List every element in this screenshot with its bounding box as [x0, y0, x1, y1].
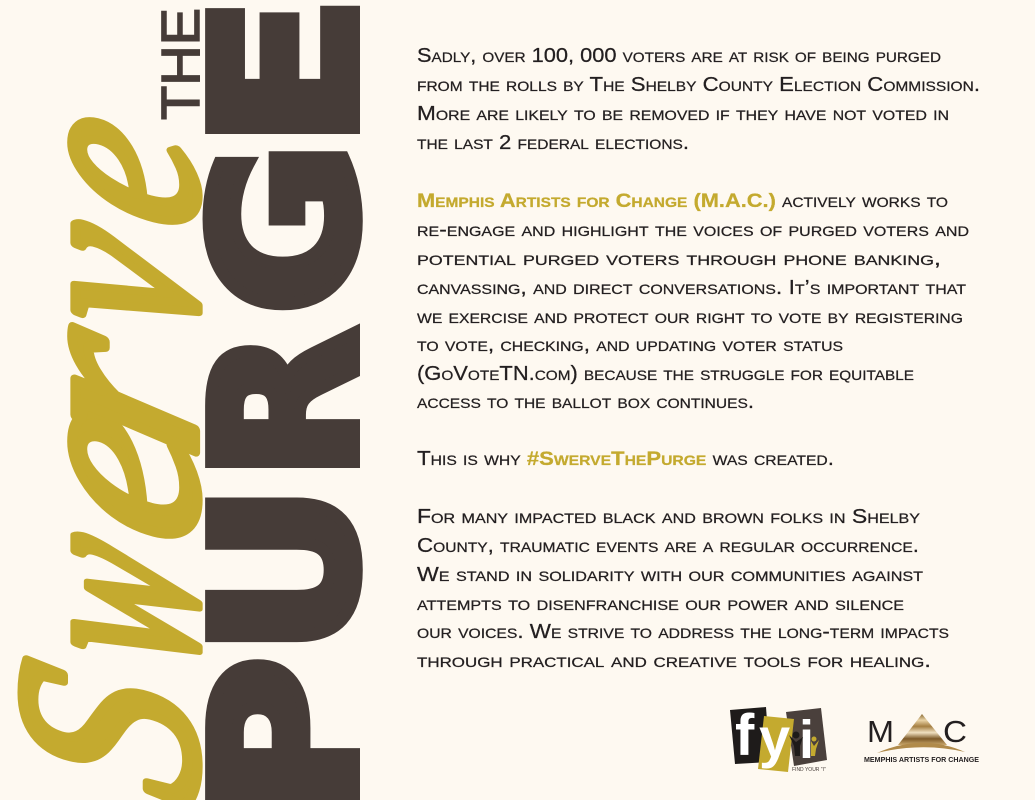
text block: Memphis Artists for Change paragraph: Memphis Artists for Change (M.A.C.) actively works to [417, 190, 948, 212]
text block: Memphis Artists for Change paragraph: to vote, checking, and updating voter status [417, 334, 843, 356]
text block: closing paragraph [417, 506, 949, 672]
text block: closing paragraph: attempts to disenfranchise our power and silence [417, 593, 904, 615]
text block: Memphis Artists for Change paragraph: (GoVoteTN.com) because the struggle for equitable [417, 363, 914, 385]
text block: intro paragraph [417, 45, 980, 154]
heading: PURGE: U [172, 485, 400, 655]
text block: Memphis Artists for Change paragraph: we exercise and protect our right to vote by registering [417, 306, 963, 328]
heading: Swerve script [0, 84, 252, 800]
text block: Memphis Artists for Change paragraph: canvassing, and direct conversations. It’s important that [417, 277, 967, 299]
text block: intro paragraph: Sadly, over 100, 000 voters are at risk of being purged [417, 45, 941, 67]
heading: THE: THE [151, 8, 211, 120]
text block: closing paragraph: County, traumatic events are a regular occurrence. [417, 535, 919, 557]
text block: Memphis Artists for Change paragraph [417, 190, 969, 413]
heading: PURGE: E [173, 0, 401, 148]
text block: closing paragraph: We stand in solidarity with our communities against [417, 564, 924, 586]
heading: PURGE [172, 0, 401, 800]
logo: Memphis Artists for Change: M [867, 714, 894, 749]
text block: intro paragraph: More are likely to be removed if they have not voted in [417, 103, 949, 125]
text block: hashtag line: This is why #SwerveThePurge was created. [417, 448, 834, 470]
logo: Memphis Artists for Change [864, 714, 979, 764]
logo: FYI Find Your I: i [799, 710, 814, 770]
text block: Memphis Artists for Change paragraph: potential purged voters through phone banking, [417, 248, 941, 270]
text block: Memphis Artists for Change paragraph: access to the ballot box continues. [417, 391, 754, 413]
logo: Memphis Artists for Change: MEMPHIS ARTISTS FOR CHANGE [864, 755, 979, 764]
heading: PURGE: R [173, 329, 401, 480]
text block: closing paragraph: through practical and creative tools for healing. [417, 650, 931, 672]
text block: closing paragraph: our voices. We strive to address the long-term impacts [417, 621, 949, 643]
heading: PURGE: G [172, 142, 400, 314]
text block: intro paragraph: the last 2 federal elections. [417, 132, 689, 154]
logo: FYI Find Your I [730, 703, 827, 773]
logo: FYI Find Your I: f [735, 703, 755, 768]
logo: FYI Find Your I: y [759, 706, 790, 769]
logo: FYI Find Your I: FIND YOUR "I" [792, 767, 826, 773]
text block: closing paragraph: For many impacted black and brown folks in Shelby [417, 506, 921, 528]
logo: Memphis Artists for Change: C [943, 714, 967, 749]
text block: intro paragraph: from the rolls by The Shelby County Election Commission. [417, 74, 980, 96]
text block: Memphis Artists for Change paragraph: re-engage and highlight the voices of purged voters and [417, 219, 969, 241]
